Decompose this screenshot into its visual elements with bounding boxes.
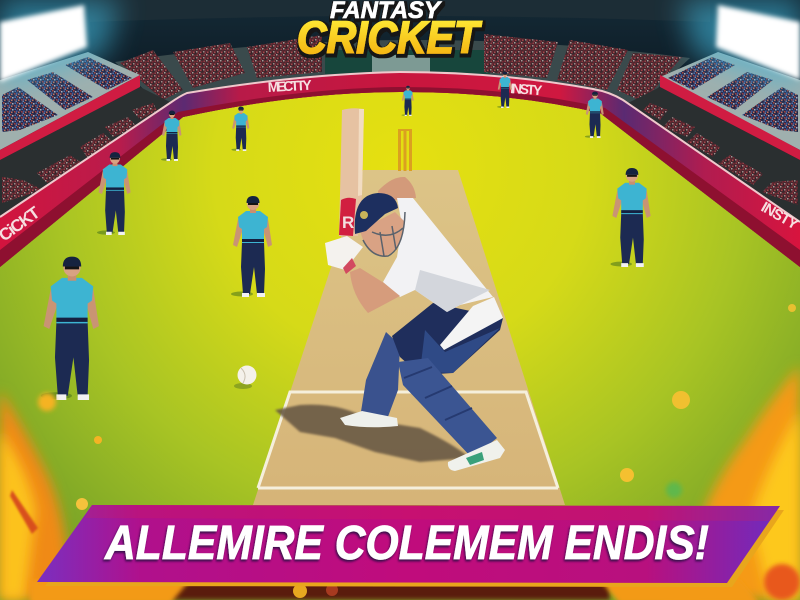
right lower stand [628,87,800,222]
batter shadow [275,405,470,462]
back shoe [340,411,398,427]
ball [234,366,256,389]
rear arm [378,177,416,206]
back leg pad [360,332,400,422]
fielder: boundary right [585,92,604,138]
fielder: mid right [610,168,651,267]
title line: CRICKET: CRICKET [297,12,482,63]
floodlight: left [0,0,120,90]
wall sign: MECTTY: MECTTY [267,77,313,95]
title [297,0,482,63]
cricket pitch [253,170,565,505]
front shoe [448,440,505,471]
trousers [392,303,503,375]
fielder: far centre [401,86,414,116]
stumps [398,129,412,171]
wall sign: INSTY: INSTY [510,80,543,98]
floodlight: right [680,0,800,90]
fielder: near left [41,257,99,400]
banner headline: ALLEMIRE COLEMEM ENDIS! [104,517,709,570]
fire: right [620,304,800,600]
left lower stand [0,87,172,217]
ember strip bottom [30,580,760,600]
fielder: mid left [231,196,272,297]
left upper stand with red ledge [0,52,140,160]
right upper stand with red ledge [660,52,800,160]
helmet and face [355,193,405,256]
batter [325,108,505,471]
wall sign: INSTY right: INSTY [758,199,800,233]
bat: R [342,213,354,232]
batting glove [325,236,363,270]
fielder: far right centre [497,72,512,108]
fielder: boundary left [161,110,182,161]
fielder: left deep [97,152,131,235]
crease markings [258,392,558,488]
fire: left [0,390,102,600]
white shirt [383,198,493,312]
crowd stands: far tier [120,34,682,102]
stadium backdrop [0,0,800,130]
bat [339,108,364,236]
banner [37,505,784,587]
front arm [350,268,400,313]
fielder: boundary left centre [231,107,249,151]
advertising boundary wall [0,72,800,267]
front leg pad [398,358,497,458]
